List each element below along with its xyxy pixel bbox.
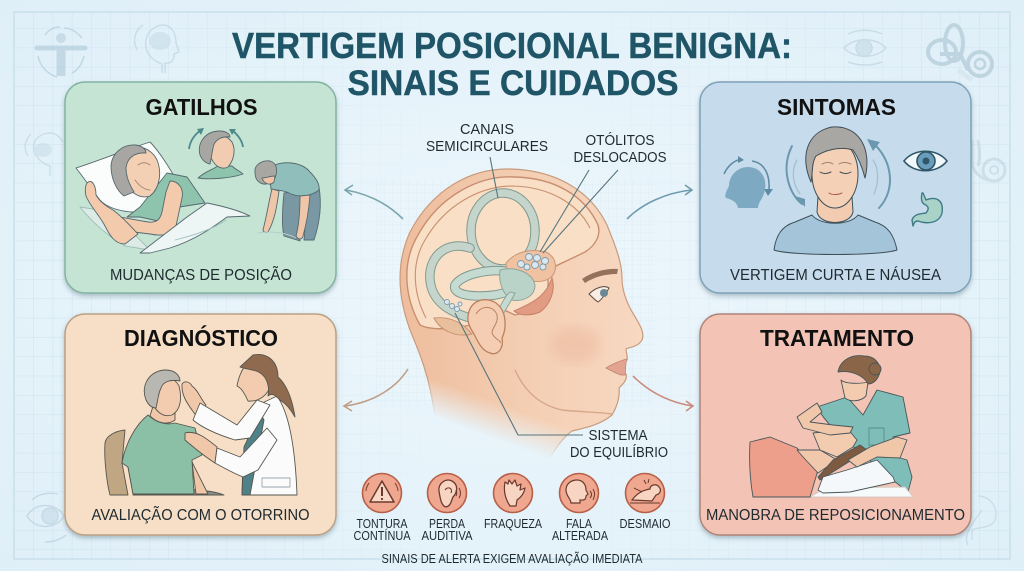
panel: gatilhos — [65, 82, 336, 293]
label: sistema do equilibrio — [570, 427, 668, 461]
label: perda auditiva — [422, 517, 473, 543]
alert: desmaio — [620, 474, 671, 531]
ear — [468, 300, 505, 354]
icon: eye — [904, 151, 947, 171]
panel: tratamento — [700, 314, 971, 535]
icon: faint body rotation — [37, 27, 85, 77]
label: tontura continua: CONTÍNUA — [354, 528, 411, 543]
caption: tratamento: MANOBRA DE REPOSICIONAMENTO — [706, 507, 965, 524]
leader line: canais — [490, 157, 498, 198]
arrow: to sintomas — [627, 185, 692, 219]
icon: stomach — [912, 193, 942, 226]
icon: faint head left — [25, 133, 63, 176]
arrow: to tratamento — [633, 376, 693, 411]
arrow: to gatilhos — [345, 185, 403, 219]
caption: sintomas: VERTIGEM CURTA E NÁUSEA — [730, 265, 941, 284]
illustration: doctor examining — [182, 354, 297, 495]
alert: tontura continua — [354, 474, 411, 543]
label: canais semicirculares: CANAIS — [460, 121, 514, 138]
label: fraqueza: FRAQUEZA — [484, 517, 543, 531]
title: VERTIGEM POSICIONAL BENIGNA: — [232, 25, 792, 66]
semicircular canals — [430, 193, 535, 318]
icon: swirl arrows around head — [787, 139, 890, 208]
otoliths — [444, 254, 548, 312]
label: otolitos deslocados: DESLOCADOS — [574, 149, 666, 166]
label: fala alterada: ALTERADA — [552, 529, 609, 543]
label: canais semicirculares — [426, 121, 548, 155]
heading: gatilhos: GATILHOS — [146, 94, 258, 120]
vestibule and otolith sac — [495, 250, 556, 327]
illustration: nurse performing maneuver — [817, 356, 912, 492]
eye and brow — [582, 269, 618, 302]
heading: sintomas: SINTOMAS — [777, 94, 896, 120]
illustration: person lying in bed — [76, 142, 250, 253]
panel: sintomas — [700, 82, 971, 293]
illustration: patient seated — [105, 370, 224, 495]
illustration: woman with closed eyes — [774, 127, 897, 254]
illustration: patient lying — [750, 403, 913, 497]
alert: fraqueza — [484, 474, 543, 531]
lips — [606, 359, 627, 375]
icon: faint inner ear top — [928, 25, 992, 80]
leader line: sistema do equilibrio — [455, 313, 583, 435]
label: sistema do equilibrio: SISTEMA — [588, 427, 648, 444]
title: SINAIS E CUIDADOS — [348, 64, 678, 103]
illustration: person bending forward — [255, 161, 320, 241]
alert: fala alterada — [552, 474, 609, 543]
label: otolitos deslocados — [574, 132, 666, 166]
label: canais semicirculares: SEMICIRCULARES — [426, 138, 548, 155]
label: fala alterada: FALA — [566, 517, 593, 531]
alert: perda auditiva — [422, 474, 473, 543]
icon: faint eye bottom left — [27, 493, 66, 542]
label: tontura continua: TONTURA — [356, 517, 408, 531]
illustration: head anatomy — [400, 157, 643, 460]
caption: diagnostico: AVALIAÇÃO COM O OTORRINO — [92, 504, 310, 524]
icon: faint eye top — [844, 30, 886, 65]
cutaway skull — [407, 177, 599, 335]
icon: faint head with brain — [135, 25, 179, 73]
illustration: head tilting back with arrows — [189, 128, 243, 179]
label: desmaio: DESMAIO — [620, 517, 671, 531]
heading: tratamento: TRATAMENTO — [760, 325, 914, 351]
label: tontura continua — [354, 517, 411, 543]
footer note: warning signs: SINAIS DE ALERTA EXIGEM AVALIAÇÃO IMEDIATA — [382, 552, 643, 566]
icon: faint brain bottom right — [966, 496, 996, 545]
icon: head silhouette with rotation — [724, 156, 773, 208]
label: sistema do equilibrio: DO EQUILÍBRIO — [570, 444, 668, 461]
head silhouette — [400, 169, 643, 460]
label: perda auditiva: AUDITIVA — [422, 529, 473, 543]
title — [232, 25, 792, 103]
leader lines: otolitos — [540, 170, 618, 253]
label: perda auditiva: PERDA — [429, 517, 466, 531]
label: otolitos deslocados: OTÓLITOS — [586, 132, 654, 149]
caption: gatilhos: MUDANÇAS DE POSIÇÃO — [110, 264, 292, 284]
arrow: to diagnostico — [344, 369, 408, 411]
icon: faint inner ear right — [972, 140, 1005, 181]
panel: diagnostico — [65, 314, 336, 535]
heading: diagnostico: DIAGNÓSTICO — [124, 324, 278, 351]
label: fala alterada — [552, 517, 609, 543]
